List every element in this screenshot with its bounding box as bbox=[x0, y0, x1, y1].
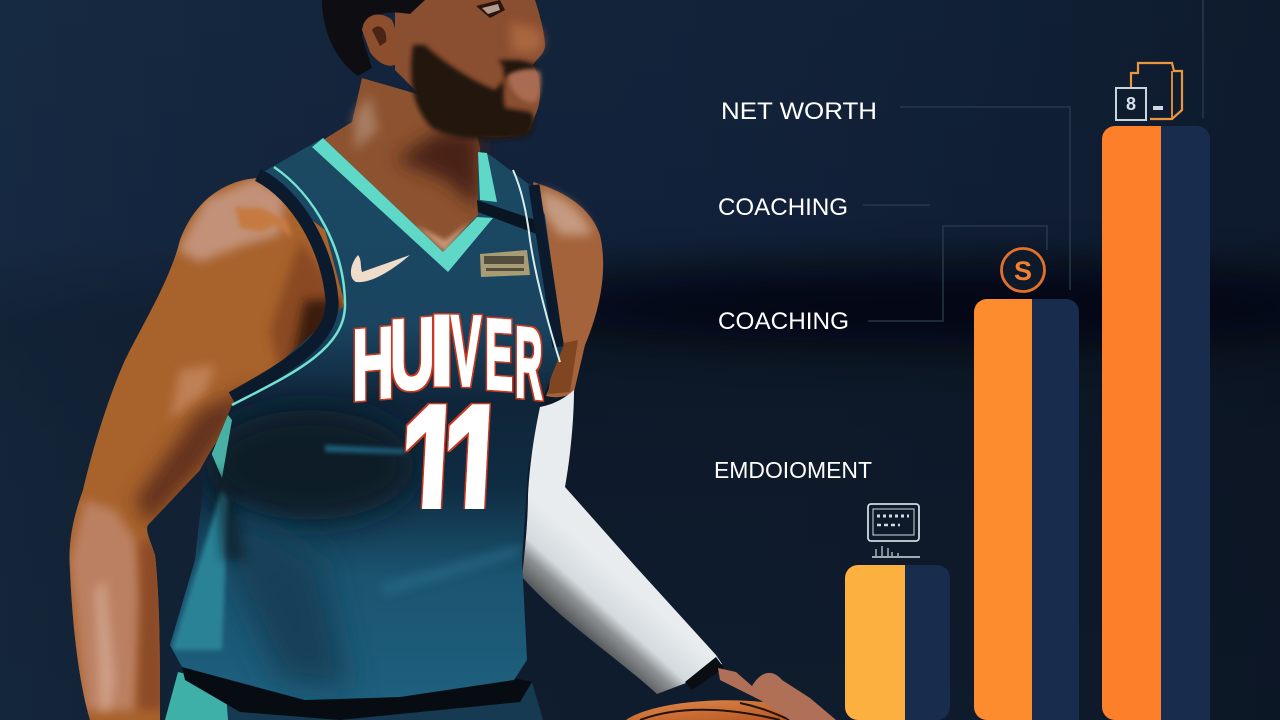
player: right shoulder bbox=[533, 182, 603, 397]
bar: endorsement bbox=[845, 565, 950, 720]
black tape bbox=[477, 200, 542, 236]
player: head bbox=[322, 0, 545, 139]
bar: net worth bbox=[1102, 126, 1210, 720]
player bbox=[60, 0, 836, 720]
label: coaching upper: COACHING bbox=[718, 194, 848, 221]
swoosh logo bbox=[351, 255, 410, 282]
jersey wordmark bbox=[352, 294, 542, 422]
label: coaching lower: COACHING bbox=[718, 308, 849, 335]
jersey wordmark: U bbox=[390, 297, 435, 412]
player: left arm bbox=[60, 170, 360, 720]
jersey wordmark: R bbox=[515, 306, 542, 421]
player: basketball bbox=[626, 700, 816, 720]
jersey shading bbox=[172, 410, 520, 690]
ear bbox=[362, 15, 398, 66]
eye bbox=[476, 0, 505, 18]
icon: dollar coin bbox=[1002, 248, 1044, 292]
icon: tablet and chart bbox=[868, 504, 920, 557]
jersey wordmark: H bbox=[352, 307, 394, 422]
jersey collar bbox=[312, 138, 493, 272]
right armhole trim bbox=[513, 170, 560, 362]
jersey number bbox=[404, 402, 491, 509]
label: endorsement: EMDOIOMENT bbox=[714, 457, 872, 483]
icon: dollar coin: S bbox=[1014, 256, 1032, 286]
left armhole trim bbox=[232, 167, 345, 405]
jersey number: 1 bbox=[435, 367, 512, 575]
player: shorts bbox=[165, 667, 543, 720]
connector lines bbox=[863, 0, 1203, 321]
player: wristband bbox=[685, 657, 724, 690]
jersey number: 1 bbox=[393, 367, 468, 576]
bar: coaching bbox=[974, 299, 1079, 720]
chest patch bbox=[480, 250, 530, 277]
face bbox=[395, 0, 545, 138]
nose highlight bbox=[510, 22, 544, 54]
icon: documents bbox=[1116, 63, 1182, 120]
jersey wordmark: V bbox=[451, 296, 481, 407]
jersey wordmark: I bbox=[430, 294, 454, 407]
beard bbox=[411, 45, 536, 139]
player: compression sleeve bbox=[522, 390, 722, 694]
lips bbox=[508, 69, 541, 102]
icon: documents: 8 bbox=[1126, 94, 1136, 114]
jersey wordmark: E bbox=[485, 299, 513, 412]
label: net worth: NET WORTH bbox=[721, 98, 877, 125]
player: neck and chest bbox=[323, 78, 480, 254]
player: jersey bbox=[170, 138, 563, 700]
hair bbox=[322, 0, 425, 76]
player: hand bbox=[718, 668, 836, 720]
